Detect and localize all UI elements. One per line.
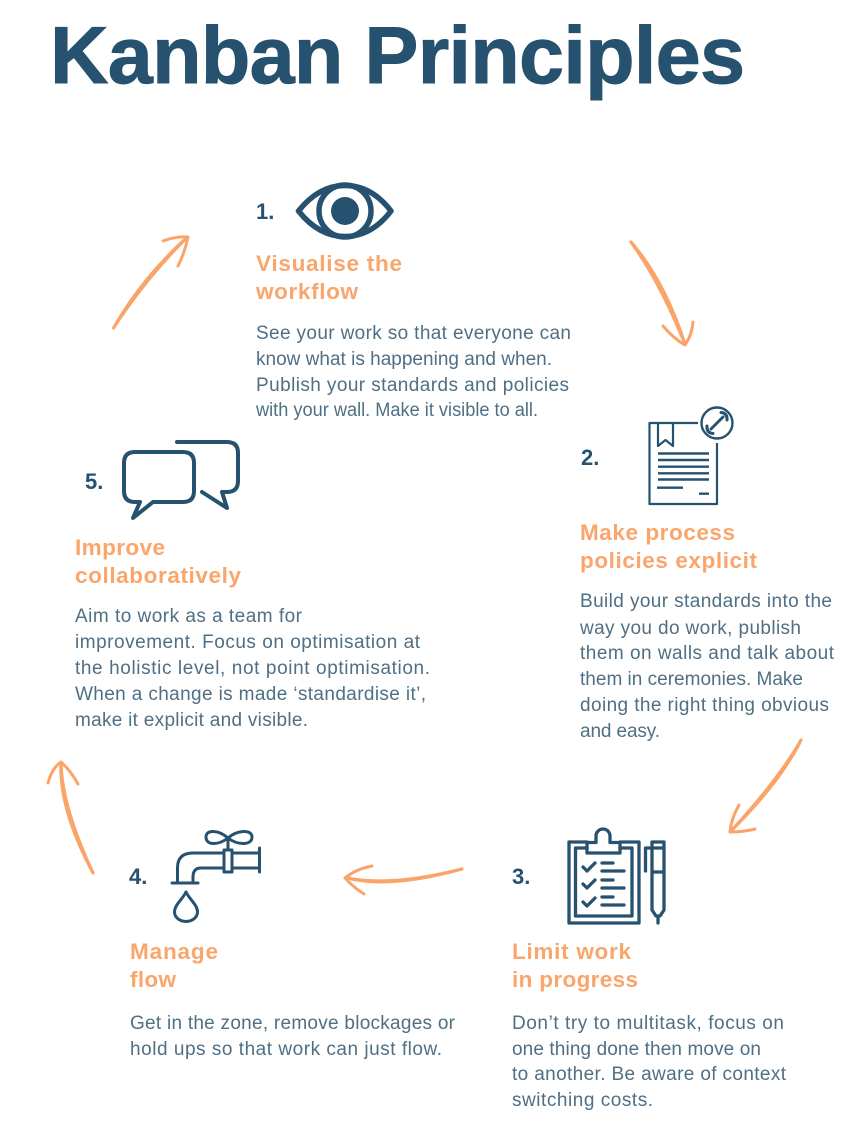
step 4 body text xyxy=(130,1013,456,1060)
step 2 body text: way you do work, publish xyxy=(579,618,801,639)
step 1 heading xyxy=(255,251,402,304)
step 3 body text xyxy=(512,1013,787,1111)
icon: eye xyxy=(298,185,391,237)
step 2 heading: policies explicit xyxy=(580,548,758,573)
step 5 heading: Improve xyxy=(75,535,165,560)
step 4 body text: Get in the zone, remove blockages or xyxy=(130,1013,456,1034)
step 3 number: 3. xyxy=(512,864,530,889)
step 2 number: 2. xyxy=(581,445,599,470)
step 1 body text xyxy=(255,323,571,421)
step 4 heading xyxy=(130,939,218,992)
step 1: visualise the workflow xyxy=(255,185,571,421)
step 1 number: 1. xyxy=(256,199,274,224)
arrow: step 5 to step 1 xyxy=(114,237,188,328)
title: Kanban Principles xyxy=(50,11,745,101)
step 2 body text xyxy=(579,591,835,742)
step 3 body text: to another. Be aware of context xyxy=(512,1064,787,1085)
step 2: make process policies explicit xyxy=(579,408,835,742)
step 5 body text: make it explicit and visible. xyxy=(75,710,308,731)
step 2 body text: doing the right thing obvious xyxy=(580,695,829,716)
step 2 body text: them in ceremonies. Make xyxy=(580,669,803,690)
step 3 heading xyxy=(512,939,638,992)
step 5 heading: collaboratively xyxy=(75,563,241,588)
step 5: improve collaboratively xyxy=(75,442,430,731)
step 2 body text: them on walls and talk about xyxy=(580,643,835,664)
arrow: step 3 to step 4 xyxy=(345,866,462,894)
icon: dripping tap xyxy=(172,831,260,922)
step 5 number: 5. xyxy=(85,469,103,494)
arrow: step 1 to step 2 xyxy=(631,242,693,345)
step 2 heading: Make process xyxy=(580,520,735,545)
step 4 heading: Manage xyxy=(130,939,218,964)
step 1 heading: workflow xyxy=(255,279,358,304)
step 1 body text: Publish your standards and policies xyxy=(256,375,569,396)
icon: speech bubbles xyxy=(124,442,238,518)
step 1 heading: Visualise the xyxy=(256,251,402,276)
step 5 body text xyxy=(75,606,430,731)
step 5 body text: the holistic level, not point optimisation. xyxy=(75,658,430,679)
step 2 body text: and easy. xyxy=(580,721,660,742)
step 5 body text: Aim to work as a team for xyxy=(75,606,303,627)
step 5 body text: improvement. Focus on optimisation at xyxy=(75,632,421,653)
step 4 body text: hold ups so that work can just flow. xyxy=(130,1039,442,1060)
step 5 heading xyxy=(75,535,241,588)
step 1 body text: with your wall. Make it visible to all. xyxy=(255,400,538,421)
step 3 heading: Limit work xyxy=(512,939,631,964)
step 1 body text: know what is happening and when. xyxy=(256,349,552,370)
step 2 heading xyxy=(580,520,758,573)
step 5 body text: When a change is made ‘standardise it’, xyxy=(75,684,426,705)
step 4 heading: flow xyxy=(130,967,176,992)
step 3 body text: Don’t try to multitask, focus on xyxy=(512,1013,784,1034)
step 1 body text: See your work so that everyone can xyxy=(256,323,571,344)
step 4: manage flow xyxy=(129,831,456,1060)
step 2 body text: Build your standards into the xyxy=(580,591,832,612)
step 3 heading: in progress xyxy=(512,967,638,992)
arrow: step 4 to step 5 xyxy=(48,762,93,873)
step 3: limit work in progress xyxy=(512,829,787,1111)
arrow: step 2 to step 3 xyxy=(730,740,801,832)
step 3 body text: one thing done then move on xyxy=(512,1039,761,1060)
step 4 number: 4. xyxy=(129,864,147,889)
icon: clipboard and pen xyxy=(569,829,664,923)
step 3 body text: switching costs. xyxy=(512,1090,653,1111)
icon: document with wrench xyxy=(650,408,732,504)
